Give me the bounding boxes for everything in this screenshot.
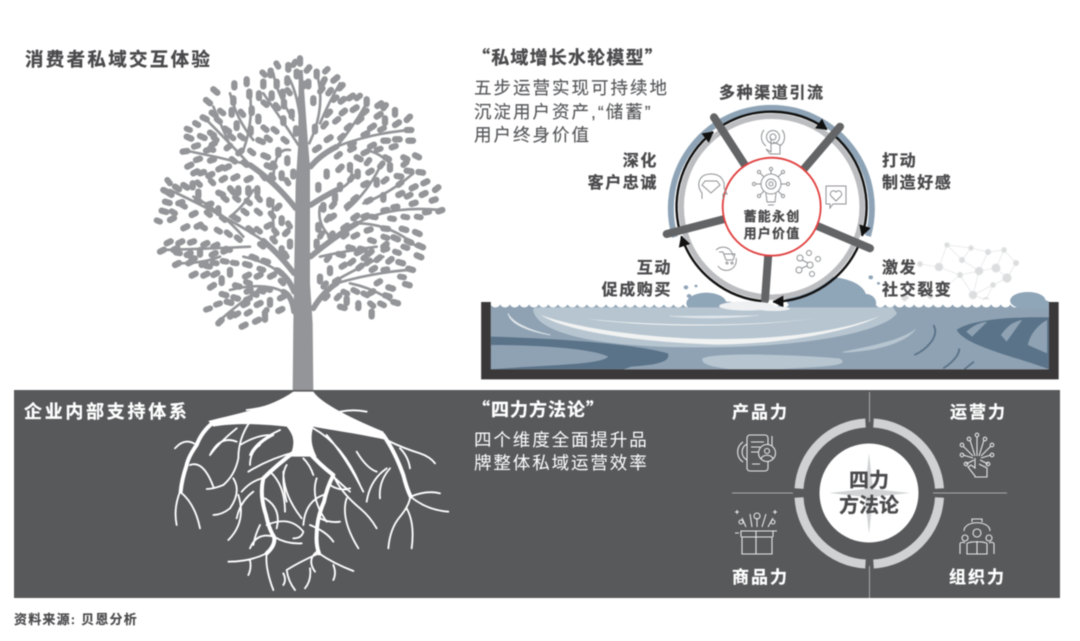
label: operation: 运营力	[950, 403, 1007, 422]
thick roots	[181, 422, 411, 553]
icon: brain diamond	[699, 174, 727, 199]
stage label: social: 激发	[882, 258, 917, 277]
stage label: social: 社交裂变	[882, 280, 952, 299]
label: organisation: 组织力	[949, 568, 1006, 587]
tree trunk	[293, 70, 313, 390]
centre label: 方法论	[839, 493, 899, 517]
label: merchandise: 商品力	[732, 568, 789, 587]
foam droplets	[684, 275, 880, 298]
icon: hand with network	[960, 433, 994, 477]
source note: 资料来源: 贝恩分析	[14, 612, 138, 627]
dark currents	[491, 317, 1049, 369]
icon: phone with user	[738, 435, 776, 471]
icon: gift box with fireworks	[735, 510, 777, 554]
mid-tone currents	[491, 320, 1047, 369]
heading: waterwheel model: “私域增长水轮模型”	[472, 44, 664, 70]
white foam at wheel base	[719, 301, 790, 311]
waterwheel description: 用户终身价值	[474, 125, 591, 145]
extra leaves left	[157, 63, 290, 315]
leaves	[193, 58, 395, 320]
foam clusters	[686, 277, 1051, 317]
root crown	[208, 392, 387, 457]
water body	[491, 305, 1049, 369]
hub label: 用户价值	[744, 226, 800, 241]
four forces description: 四个维度全面提升品	[474, 430, 649, 450]
light currents	[533, 307, 916, 369]
label: product: 产品力	[732, 403, 789, 422]
wheel spokes	[667, 117, 870, 300]
water surface scallops	[486, 291, 1020, 316]
white wave stripes	[541, 315, 880, 345]
icon: heart message	[826, 186, 846, 208]
stage label: purchase: 互动	[637, 259, 672, 277]
heading: four forces: “四力方法论”	[472, 396, 605, 422]
bottom dark panel	[14, 390, 1060, 598]
stage label: favour: 制造好感	[882, 173, 952, 192]
icon: shopping cart	[716, 247, 736, 270]
four forces description: 牌整体私域运营效率	[474, 453, 649, 473]
stage label: channels: 多种渠道引流	[719, 83, 825, 102]
stage label: purchase: 促成购买	[602, 280, 672, 299]
black rotation arrows	[677, 112, 867, 302]
centre disc	[820, 444, 918, 542]
cross dividers	[732, 392, 1007, 598]
stage label: loyalty: 深化	[623, 151, 658, 170]
icon: social people	[796, 250, 820, 276]
tree roots	[175, 392, 448, 590]
segmented ring	[799, 423, 940, 564]
icon: touch target	[761, 130, 785, 154]
icon: light bulb network	[752, 167, 790, 205]
fine roots	[175, 402, 448, 590]
grey inner ring	[681, 116, 862, 297]
blue outer ring	[671, 108, 872, 237]
medium branches	[163, 73, 440, 320]
network graphic	[902, 242, 1019, 308]
stage label: favour: 打动	[882, 151, 917, 170]
four forces diagram	[732, 392, 1007, 598]
waterwheel description: 五步运营实现可持续地	[474, 78, 669, 98]
heavy branches	[250, 147, 357, 312]
icon: team with gear	[960, 519, 994, 554]
tank walls	[481, 302, 1059, 379]
water tank	[481, 275, 1059, 379]
red hub	[723, 158, 821, 256]
stage label: loyalty: 客户忠诚	[588, 173, 658, 192]
wheel face	[680, 115, 864, 299]
main title: 消费者私域交互体验	[25, 49, 212, 70]
thin dark curves	[914, 325, 974, 369]
tree illustration	[157, 58, 442, 390]
water wheel	[667, 108, 872, 302]
hub label: 蓄能永创	[744, 209, 800, 224]
panel heading: internal support: 企业内部支持体系	[24, 401, 190, 422]
compass star	[829, 453, 910, 534]
extra leaves right	[293, 62, 421, 306]
centre label: 四力	[849, 469, 889, 492]
waterwheel description: 沉淀用户资产,“储蓄”	[474, 102, 653, 122]
faint wave lines	[508, 313, 758, 335]
